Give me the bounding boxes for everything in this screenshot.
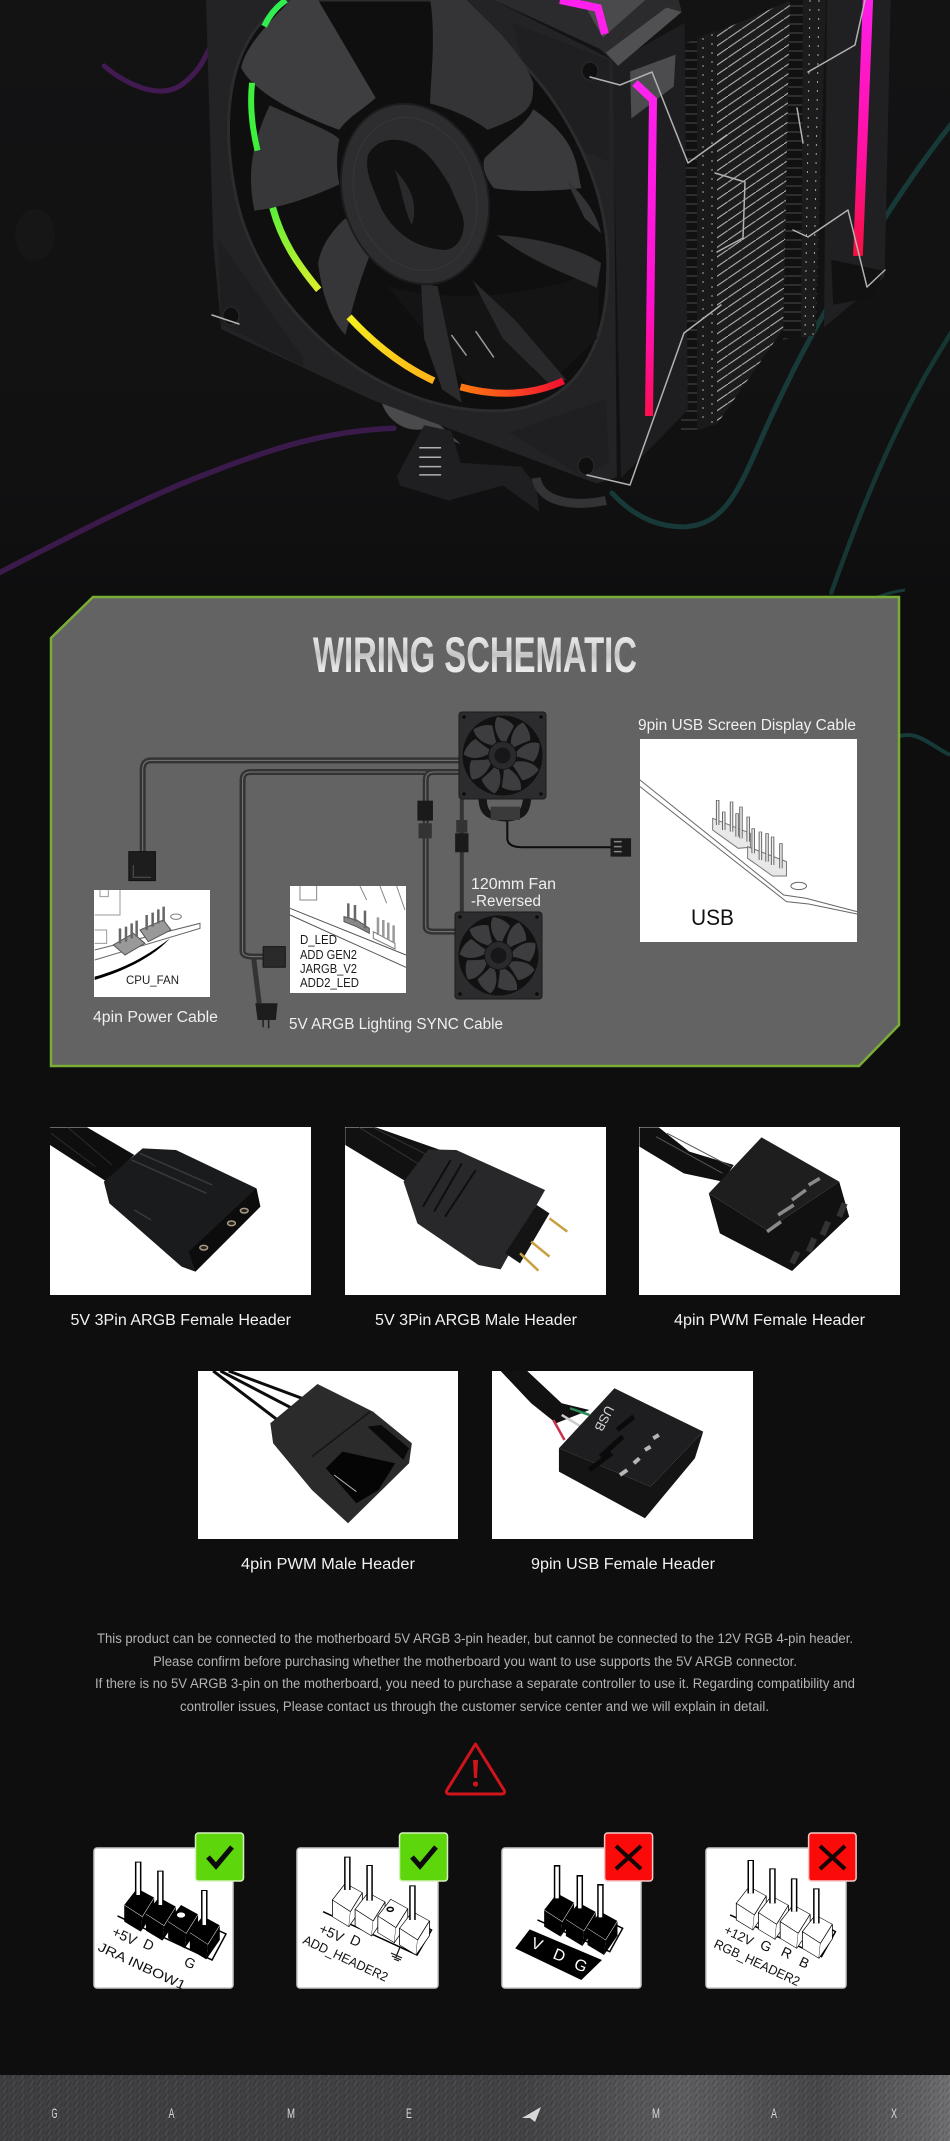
header illustration bbox=[730, 1860, 835, 1958]
fan hub with logo bbox=[318, 84, 512, 304]
label: 9pin USB screen display cable: 9pin USB Screen Display Cable bbox=[638, 717, 856, 734]
badge: check bbox=[400, 1833, 448, 1881]
V D G plate labels bbox=[529, 1935, 589, 1976]
footer strip: GAMEMAX: M bbox=[287, 2105, 295, 2121]
header pin labels: JRA INBOW1 bbox=[96, 1939, 188, 1993]
card: JRAINBOW1 supported bbox=[94, 1833, 244, 1993]
text block: compatibility note bbox=[95, 1631, 855, 1714]
bottom mount and heat pipe bbox=[382, 403, 606, 512]
silver retention clips bbox=[212, 0, 885, 485]
label: 120mm fan reversed bbox=[471, 876, 556, 910]
card: ARGB motherboard header: ADD GEN2 bbox=[300, 947, 357, 962]
cable: fan ARGB and power split bbox=[417, 772, 468, 932]
icon: warning triangle bbox=[446, 1744, 505, 1794]
header illustration bbox=[515, 1865, 623, 1980]
cable: 5V ARGB sync bbox=[243, 772, 459, 1028]
label: 5V ARGB lighting sync cable: 5V ARGB Lighting SYNC Cable bbox=[289, 1016, 503, 1033]
footer strip: GAMEMAX bbox=[0, 2075, 950, 2141]
badge: cross bbox=[809, 1833, 856, 1881]
heat pipes columns bbox=[681, 0, 826, 435]
caption: 4pin PWM Male Header bbox=[241, 1556, 415, 1573]
footer strip: GAMEMAX: A bbox=[168, 2105, 175, 2121]
header illustration bbox=[118, 1862, 226, 1960]
connector: 4pin PWM male bbox=[198, 1371, 458, 1573]
connector: 9pin USB female bbox=[492, 1371, 753, 1573]
card: CPU fan header: CPU_FAN bbox=[126, 973, 179, 987]
footer strip: GAMEMAX: A bbox=[771, 2105, 777, 2121]
header pin labels: +5V bbox=[317, 1920, 347, 1946]
text block: compatibility note: This product can be connected to the motherboard 5V ARGB 3-pin header, but cannot be connected to the 12V RGB 4-pin header. bbox=[97, 1631, 853, 1646]
label: 120mm fan reversed: -Reversed bbox=[471, 893, 541, 910]
cable: 4pin power bbox=[129, 760, 459, 881]
header pin labels: D bbox=[348, 1931, 364, 1950]
cable: 9pin USB bbox=[507, 822, 631, 857]
card: VDG not supported bbox=[502, 1833, 653, 1988]
RGB light ring bbox=[251, 0, 563, 393]
header pin labels: RGB_HEADER2 bbox=[712, 1936, 802, 1989]
connector: 5V 3pin ARGB female bbox=[50, 1127, 311, 1329]
connector: 5V 3pin ARGB male bbox=[345, 1127, 606, 1329]
icon: footer logo mark bbox=[522, 2107, 541, 2122]
frame screw holes bbox=[223, 62, 598, 475]
header pin labels: +12V bbox=[722, 1922, 756, 1949]
label: 4pin power cable: 4pin Power Cable bbox=[93, 1009, 218, 1026]
footer strip: GAMEMAX: X bbox=[891, 2105, 897, 2121]
front fan frame and side face bbox=[206, 0, 688, 484]
icon: top cooler fan bbox=[459, 712, 546, 799]
fan opening and blades bbox=[228, 0, 608, 411]
footer strip: GAMEMAX: G bbox=[52, 2105, 58, 2121]
footer strip: GAMEMAX: E bbox=[406, 2105, 412, 2121]
badge: check bbox=[196, 1833, 244, 1881]
label: 120mm fan reversed: 120mm Fan bbox=[471, 876, 556, 893]
icon: reversed 120mm fan bbox=[455, 912, 542, 999]
card: CPU fan header bbox=[94, 890, 210, 997]
card: ADD_HEADER2 supported bbox=[297, 1833, 448, 1988]
text block: compatibility note: If there is no 5V ARGB 3-pin on the motherboard, you need to purchase a separate controller to use it. Regarding compatibility and bbox=[95, 1676, 855, 1691]
header pin labels: +5V bbox=[110, 1923, 140, 1949]
caption: 5V 3Pin ARGB Female Header bbox=[70, 1312, 291, 1329]
text: USB on connector: USB bbox=[591, 1403, 617, 1434]
V D G plate labels: V bbox=[529, 1935, 545, 1955]
hero background with glowing cable curves bbox=[0, 0, 950, 755]
card: ARGB motherboard header bbox=[290, 886, 406, 993]
card: RGB_HEADER2 not supported bbox=[706, 1833, 856, 1989]
header pin labels: R bbox=[779, 1943, 795, 1962]
header pin labels: G bbox=[182, 1953, 198, 1972]
card: ARGB motherboard header: D_LED bbox=[300, 932, 337, 947]
card: ARGB motherboard header: ADD2_LED bbox=[300, 975, 359, 990]
V D G plate labels: G bbox=[572, 1956, 589, 1976]
connector: 4pin PWM female bbox=[639, 1127, 900, 1329]
header pin labels: D bbox=[141, 1935, 157, 1954]
heading: wiring schematic: WIRING SCHEMATIC bbox=[313, 627, 637, 683]
rear fan frame bbox=[824, 0, 891, 327]
panel: wiring schematic bbox=[51, 597, 899, 1066]
header pin labels bbox=[96, 1923, 198, 1993]
caption: 4pin PWM Female Header bbox=[674, 1312, 865, 1329]
card: USB motherboard header bbox=[640, 739, 857, 942]
cooler base under top fan bbox=[478, 799, 531, 822]
text block: compatibility note: Please confirm before purchasing whether the motherboard you want to use supports the 5V ARGB connector. bbox=[153, 1654, 797, 1669]
card: ARGB motherboard header: JARGB_V2 bbox=[300, 961, 357, 976]
V D G plate labels: D bbox=[551, 1946, 568, 1966]
footer strip: GAMEMAX: M bbox=[652, 2105, 660, 2121]
caption: 5V 3Pin ARGB Male Header bbox=[375, 1312, 577, 1329]
badge: cross bbox=[605, 1833, 653, 1881]
text block: compatibility note: controller issues, Please contact us through the customer service center and we will explain in detail. bbox=[180, 1699, 769, 1714]
header pin labels: G bbox=[758, 1936, 774, 1955]
caption: 9pin USB Female Header bbox=[531, 1556, 715, 1573]
cooler product render bbox=[206, 0, 891, 512]
magenta side LED strip bbox=[560, 0, 653, 416]
header illustration bbox=[323, 1857, 432, 1955]
header pin labels: ADD_HEADER2 bbox=[301, 1932, 390, 1985]
heat sink fins bbox=[717, 0, 792, 424]
card: USB motherboard header: USB bbox=[691, 905, 734, 930]
header pin labels: B bbox=[797, 1953, 812, 1972]
